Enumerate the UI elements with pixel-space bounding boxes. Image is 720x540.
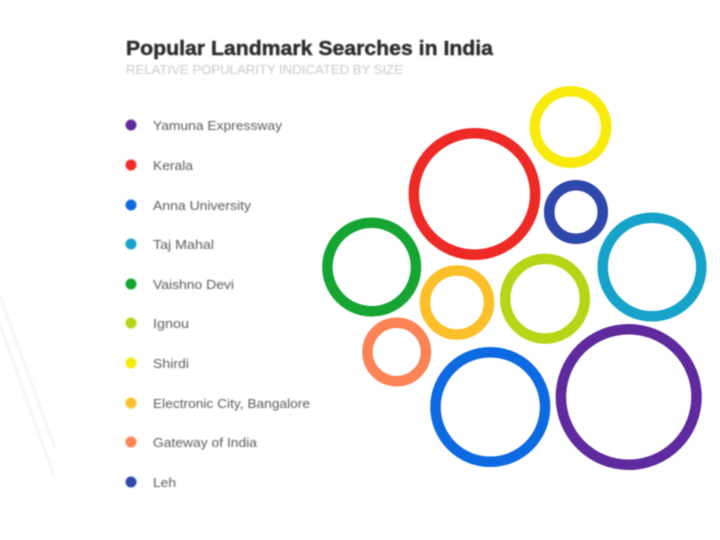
ring: Kerala xyxy=(414,133,535,255)
legend item: Leh xyxy=(126,476,176,490)
legend item: Yamuna Expressway: Yamuna Expressway xyxy=(153,119,283,133)
legend item: Taj Mahal xyxy=(126,238,214,252)
legend item: Taj Mahal: Taj Mahal xyxy=(153,238,214,252)
legend item: Kerala xyxy=(126,159,193,173)
legend item: Gateway of India: Gateway of India xyxy=(153,436,257,450)
decorative background lines xyxy=(0,296,55,476)
ring: Vaishno Devi xyxy=(327,223,416,311)
legend item: Ignou: Ignou xyxy=(153,317,189,331)
legend item: Anna University xyxy=(126,199,252,213)
ring: Anna University xyxy=(436,352,545,462)
legend item: Anna University: Anna University xyxy=(153,199,252,213)
legend item: Vaishno Devi xyxy=(126,278,234,292)
legend xyxy=(126,119,310,490)
ring: Taj Mahal xyxy=(603,218,701,316)
legend item: Shirdi: Shirdi xyxy=(153,357,189,371)
ring: Gateway of India xyxy=(368,323,426,381)
legend item: Shirdi xyxy=(126,357,189,371)
ring: Shirdi xyxy=(535,91,606,163)
legend item: Ignou xyxy=(126,317,189,331)
ring: Ignou xyxy=(505,259,585,339)
title: Popular Landmark Searches in India xyxy=(126,38,494,60)
ring: Yamuna Expressway xyxy=(561,329,696,465)
legend item: Electronic City, Bangalore: Electronic City, Bangalore xyxy=(153,397,310,411)
subtitle: RELATIVE POPULARITY INDICATED BY SIZE xyxy=(126,63,403,77)
legend item: Kerala: Kerala xyxy=(153,159,193,173)
ring: Leh xyxy=(549,185,603,239)
bubble chart xyxy=(327,91,701,465)
legend item: Vaishno Devi: Vaishno Devi xyxy=(153,278,234,292)
ring: Electronic City, Bangalore xyxy=(425,270,489,334)
legend item: Leh: Leh xyxy=(153,476,176,490)
